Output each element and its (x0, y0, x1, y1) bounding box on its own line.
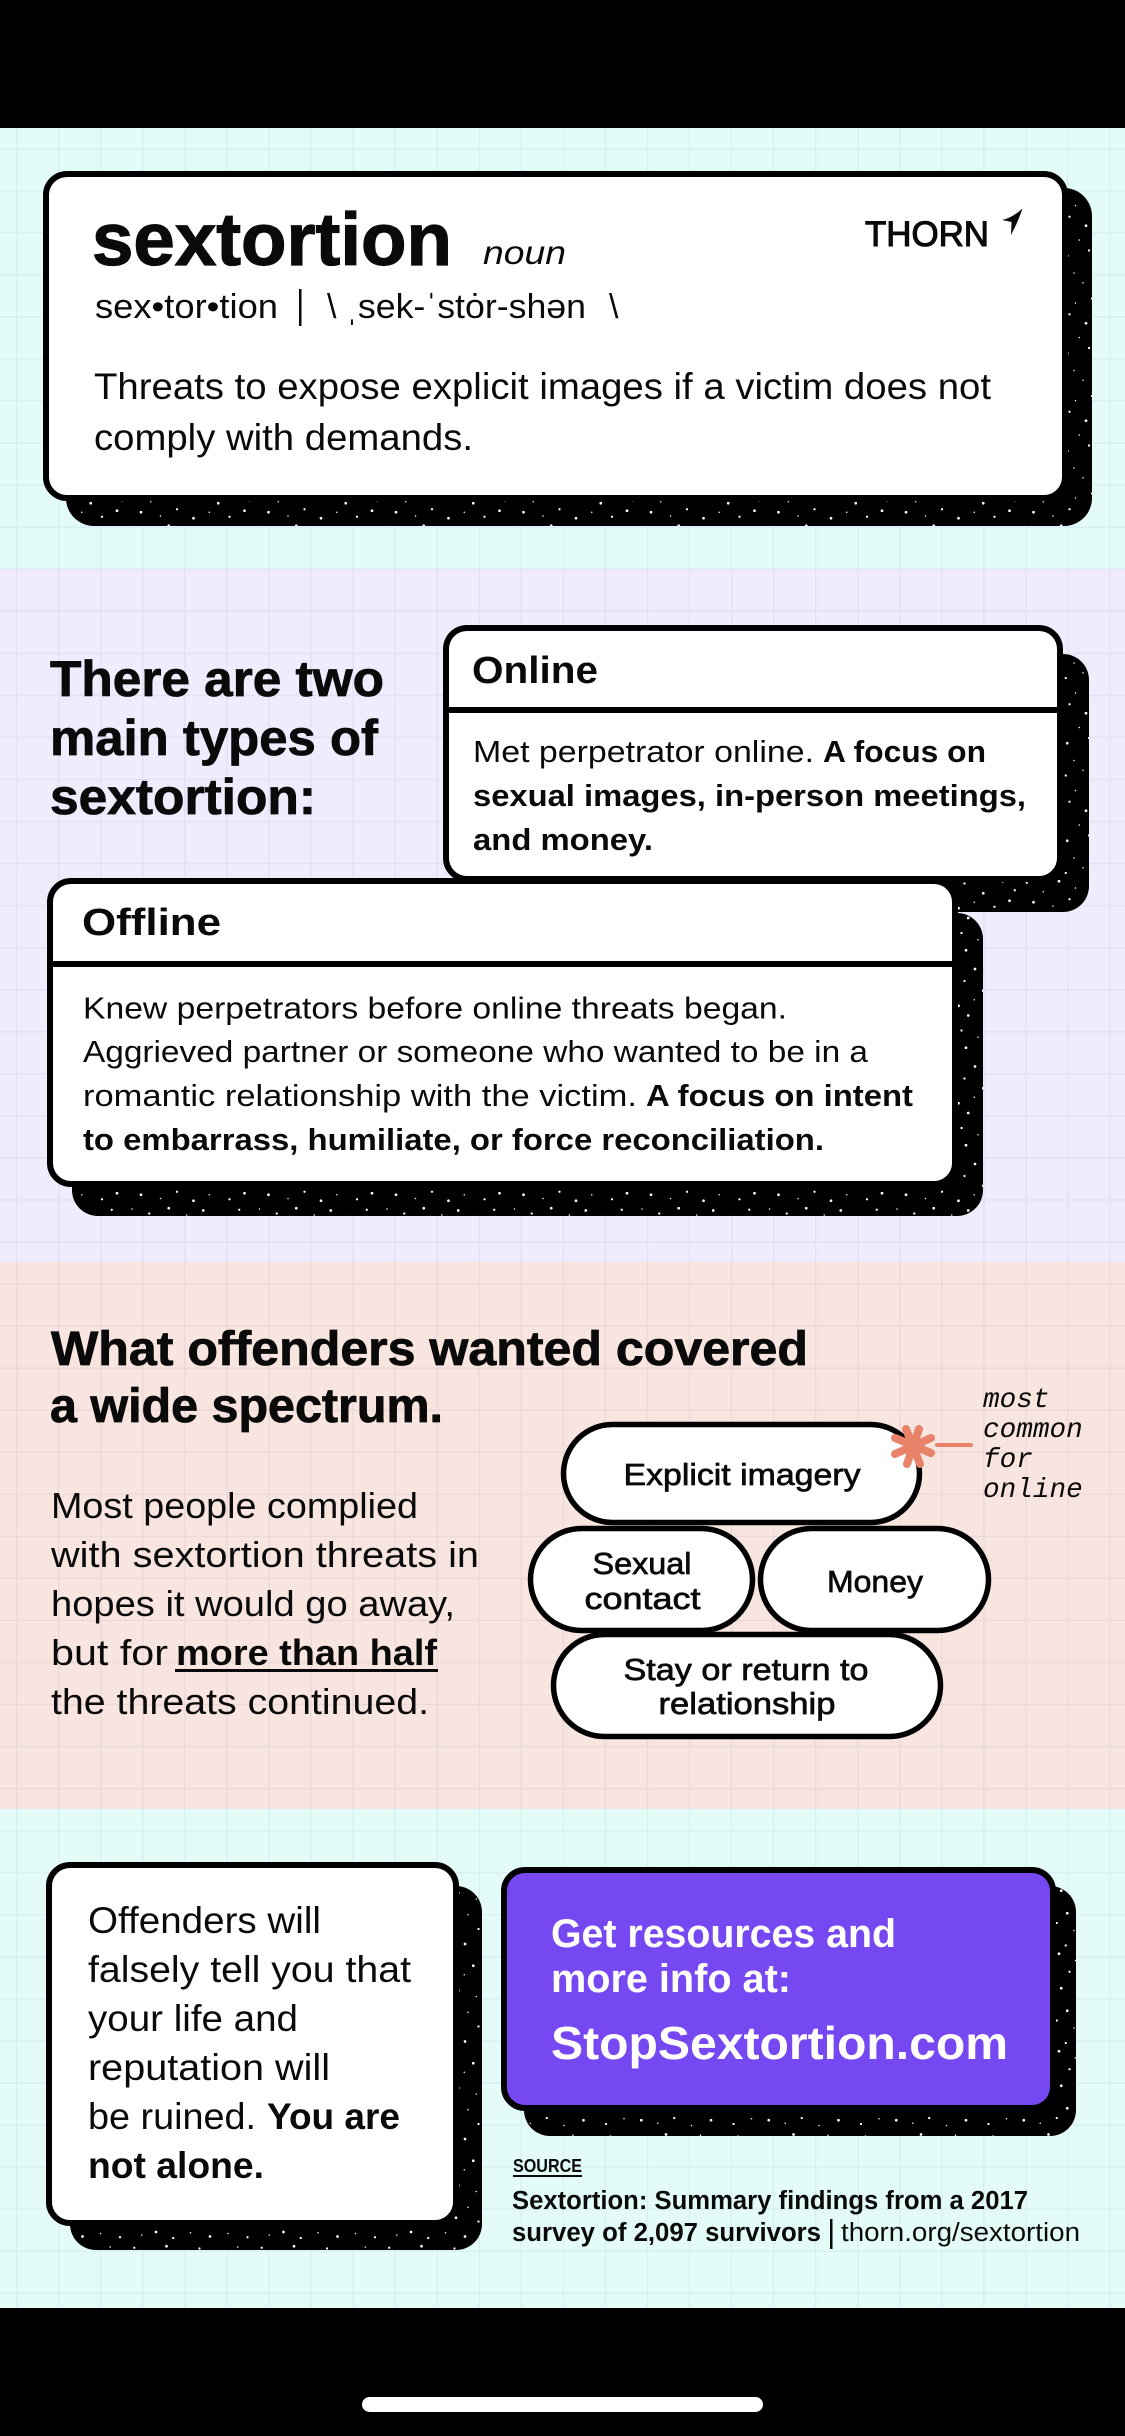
text: online description: and money. (473, 823, 653, 857)
text: pronunciation: ˌsek-ˈstȯr-shən (346, 288, 586, 326)
text: compliance paragraph: more than half (176, 1632, 438, 1673)
pill: sexual contact: Sexual (592, 1546, 692, 1581)
pill: sexual contact: contact (584, 1581, 701, 1616)
text: offline description: A focus on intent (646, 1079, 913, 1113)
text: compliance paragraph: Most people complied (51, 1485, 418, 1526)
heading: sextortion: sextortion (92, 198, 452, 281)
annotation: most common for online: common (983, 1415, 1083, 1446)
annotation: most common for online: most (983, 1385, 1049, 1416)
annotation: most common for online (983, 1385, 1083, 1506)
text: offenders will falsely tell you: falsely tell you that (88, 1949, 412, 1990)
text: website: StopSextortion.com (551, 2017, 1008, 2069)
text: online description: Met perpetrator online. (473, 735, 814, 769)
heading: two main types: main types of (50, 710, 378, 766)
text: compliance paragraph: with sextortion threats in (50, 1534, 479, 1575)
text: offline description: romantic relationship with the victim. (83, 1079, 637, 1113)
heading: what offenders wanted: a wide spectrum. (50, 1380, 443, 1433)
pill: stay or return to relationship (554, 1634, 940, 1736)
source: survey of 2,097 survivors (512, 2219, 821, 2247)
logo: Thorn (865, 208, 1022, 254)
text: pronunciation: \ (609, 288, 619, 326)
text: offenders will falsely tell you: You are (267, 2096, 400, 2137)
logo: Thorn: THORN (865, 215, 989, 254)
pill: stay or return to relationship: relationship (658, 1686, 836, 1721)
panel: online card (446, 628, 1089, 912)
text: offenders will falsely tell you: reputation will (88, 2047, 330, 2088)
text: offenders will falsely tell you: be ruined. (88, 2096, 256, 2137)
panel: closing section (0, 1809, 1125, 2308)
text: offenders will falsely tell you: your life and (88, 1998, 298, 2039)
panel: resources call to action (504, 1870, 1076, 2136)
text: offline description: to embarrass, humiliate, or force reconciliation. (83, 1123, 824, 1157)
text: compliance paragraph: the threats continued. (51, 1681, 429, 1722)
pill: sexual contact (530, 1528, 752, 1630)
text: compliance paragraph: but for (51, 1632, 168, 1673)
panel: offline card (50, 881, 983, 1216)
text: get resources: more info at: (551, 1957, 791, 2001)
panel: definition card (46, 174, 1092, 526)
text: offenders will falsely tell you: Offenders will (88, 1900, 321, 1941)
text: online description: A focus on (823, 735, 986, 769)
pill: explicit imagery (564, 1424, 920, 1522)
text: noun: noun (483, 234, 566, 271)
text: definition: comply with demands. (94, 417, 473, 458)
pill: money (760, 1528, 988, 1630)
source: SOURCE (513, 2156, 582, 2176)
pill: explicit imagery: Explicit imagery (624, 1457, 861, 1492)
heading: what offenders wanted: What offenders wanted covered (51, 1323, 808, 1376)
text: get resources (551, 1912, 896, 2001)
source: thorn.org/sextortion (841, 2219, 1080, 2247)
text: offline description: Knew perpetrators before online threats began. (83, 992, 787, 1026)
annotation: most common for online: online (983, 1475, 1083, 1506)
panel: two types section (0, 569, 1125, 1262)
text: offenders will falsely tell you (88, 1900, 412, 2186)
text: pronunciation: \ (327, 288, 337, 326)
text: online description (473, 735, 1026, 857)
text: get resources: Get resources and (551, 1912, 896, 1956)
panel: reassurance card (49, 1865, 482, 2250)
text: online description: sexual images, in-person meetings, (473, 779, 1026, 813)
heading: what offenders wanted (50, 1323, 808, 1433)
heading: two main types: sextortion: (50, 769, 316, 825)
text: definition (94, 366, 992, 458)
pill: money: Money (827, 1564, 924, 1599)
panel: definition section (0, 128, 1125, 569)
panel: offender demands section (0, 1262, 1125, 1809)
heading: two main types: There are two (50, 651, 384, 707)
source (512, 2156, 1080, 2249)
text: offline description (83, 992, 913, 1157)
text: compliance paragraph (50, 1485, 479, 1722)
pill: stay or return to relationship: Stay or return to (624, 1652, 868, 1687)
text: pronunciation (95, 288, 619, 326)
heading: two main types (50, 651, 384, 825)
text: compliance paragraph: hopes it would go away, (51, 1583, 455, 1624)
status bar: top black band (0, 0, 1125, 128)
text: offline description: Aggrieved partner or someone who wanted to be in a (83, 1035, 868, 1069)
text: definition: Threats to expose explicit images if a victim does not (94, 366, 992, 407)
source: Sextortion: Summary findings from a 2017 (512, 2187, 1028, 2215)
text: pronunciation: sex•tor•tion (95, 288, 278, 326)
text: offenders will falsely tell you: not alone. (88, 2145, 264, 2186)
icon: orange asterisk with leader line (895, 1429, 971, 1464)
bottom black band with home indicator (0, 2308, 1125, 2436)
annotation: most common for online: for (983, 1445, 1033, 1476)
heading: online: Online (472, 650, 598, 692)
heading: offline: Offline (82, 902, 221, 944)
